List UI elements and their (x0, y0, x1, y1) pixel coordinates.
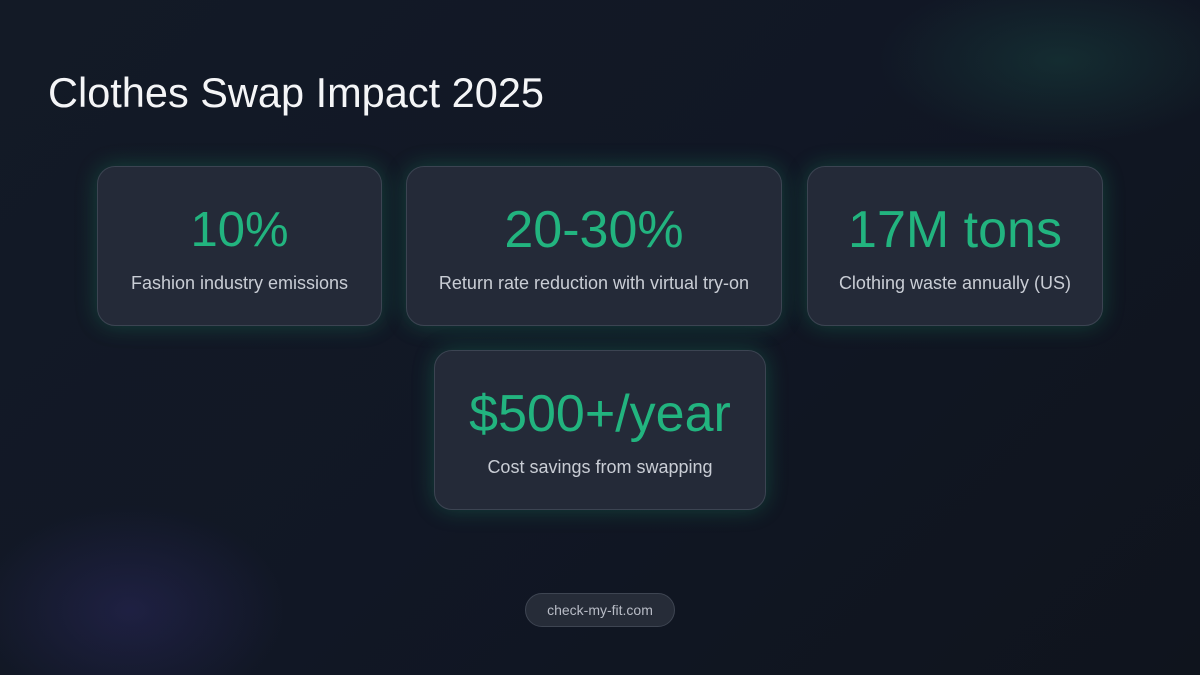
title: Clothes Swap Impact 2025 (48, 69, 544, 116)
card: fashion emissions: Fashion industry emissions (131, 273, 348, 293)
footer pill: check-my-fit.com (547, 602, 653, 618)
card: return rate: 20-30% (504, 201, 684, 259)
card: return rate: Return rate reduction with virtual try-on (439, 273, 749, 293)
card: clothing waste: Clothing waste annually (US) (839, 273, 1071, 293)
card: return rate (406, 166, 782, 326)
card: cost savings: $500+/year (469, 385, 731, 443)
card: fashion emissions (97, 166, 382, 326)
card: cost savings: Cost savings from swapping (487, 457, 713, 477)
footer pill (525, 593, 675, 627)
card: clothing waste (807, 166, 1103, 326)
card: cost savings (434, 350, 766, 510)
card: fashion emissions: 10% (190, 203, 289, 257)
card: clothing waste: 17M tons (848, 201, 1062, 259)
